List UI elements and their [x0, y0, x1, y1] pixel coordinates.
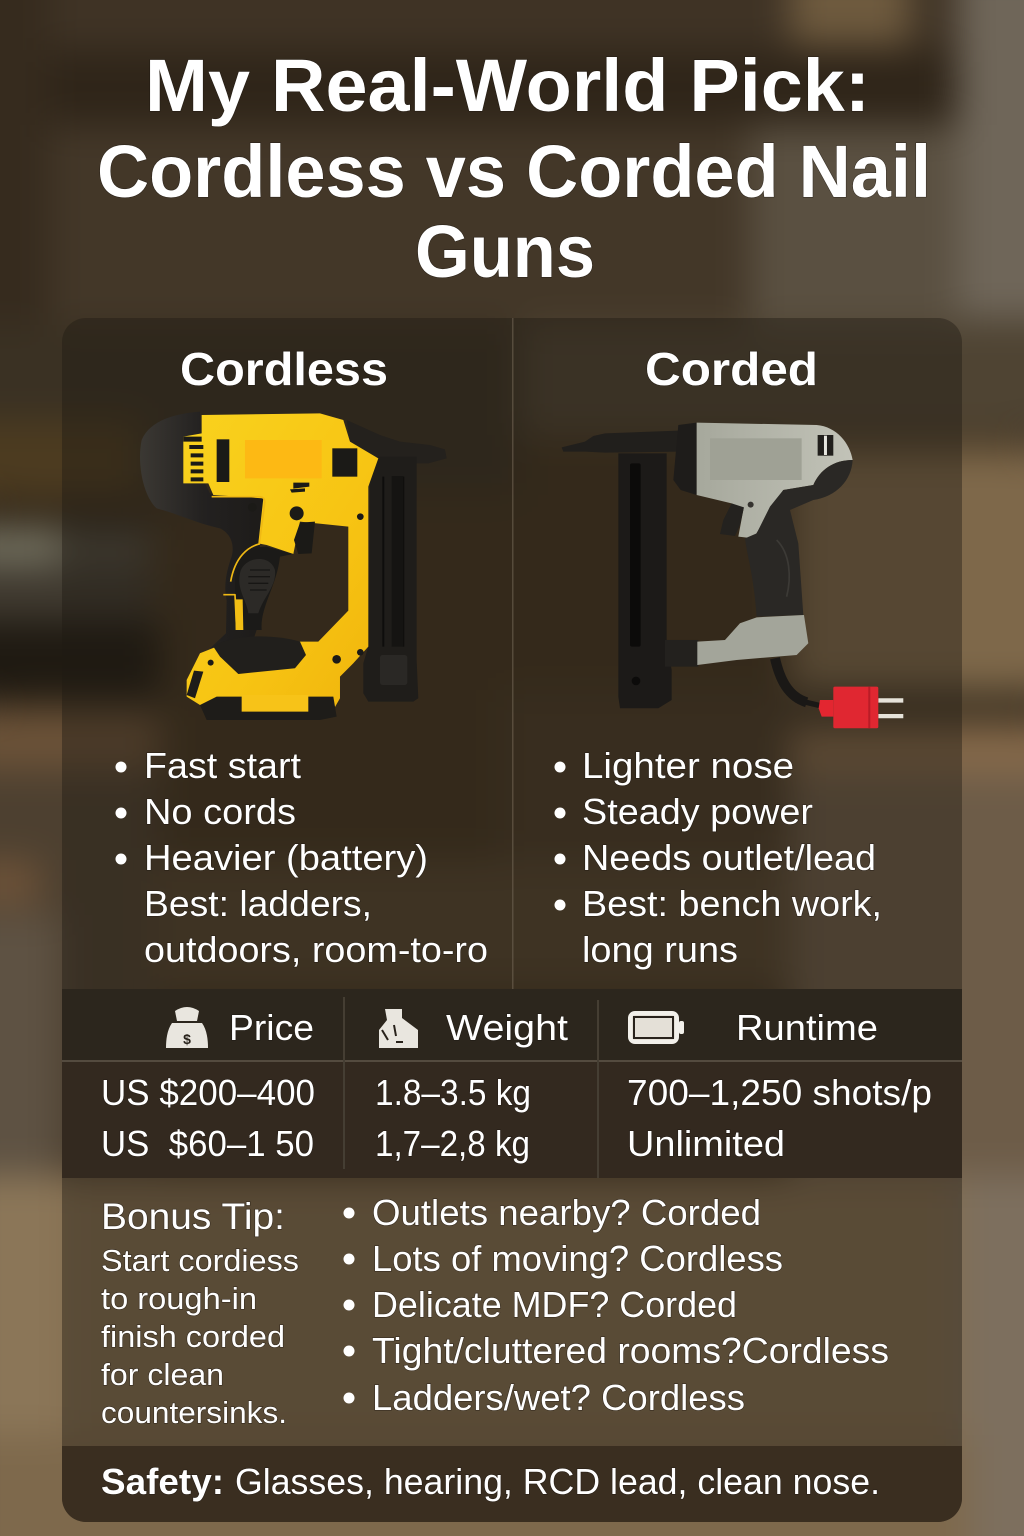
callout: bonus tip: Start cordiess: [101, 1243, 299, 1278]
list: decision checklist: Tight/cluttered rooms?Cordless: [372, 1330, 889, 1371]
list: corded points: Steady power: [582, 791, 813, 832]
footer: safety band: Safety:: [101, 1461, 224, 1502]
title: Cordless vs Corded Nail: [97, 130, 931, 213]
row: cordless values: US $200–400: [101, 1072, 315, 1113]
panel: cordless column: [116, 343, 488, 970]
list: cordless points: outdoors, room-to-ro: [144, 929, 488, 970]
icon: weight bottle: [379, 1009, 418, 1048]
list: decision checklist: [344, 1192, 889, 1418]
icon: battery: [630, 1013, 684, 1042]
list: cordless points: [116, 745, 488, 970]
icon: corded grey nail gun: [562, 423, 903, 728]
row: corded values: US $60–1 50: [101, 1123, 314, 1164]
table: price, weight and runtime: [62, 989, 962, 1178]
row: cordless values: 1.8–3.5 kg: [375, 1072, 531, 1113]
row: cordless values: [101, 1072, 932, 1113]
icon: money bag: [166, 1007, 208, 1048]
label: runtime: Runtime: [736, 1007, 878, 1048]
icon: money bag: $: [183, 1031, 191, 1047]
label: weight: Weight: [446, 1007, 568, 1048]
panel: comparison card: [62, 318, 962, 1522]
list: decision checklist: Delicate MDF? Corded: [372, 1284, 737, 1325]
panel: corded column: [554, 343, 903, 970]
callout: bonus tip: Bonus Tip:: [101, 1196, 285, 1237]
list: cordless points: Best: ladders,: [144, 883, 372, 924]
callout: bonus tip: countersinks.: [101, 1395, 287, 1430]
title: My Real-World Pick:: [145, 44, 870, 127]
list: decision checklist: Outlets nearby? Corded: [372, 1192, 761, 1233]
list: decision checklist: Ladders/wet? Cordless: [372, 1377, 745, 1418]
list: corded points: Needs outlet/lead: [582, 837, 876, 878]
list: corded points: Lighter nose: [582, 745, 794, 786]
list: corded points: Best: bench work,: [582, 883, 882, 924]
list: cordless points: Heavier (battery): [144, 837, 428, 878]
row: corded values: 1,7–2,8 kg: [375, 1123, 530, 1164]
callout: bonus tip: [101, 1196, 299, 1430]
row: cordless values: 700–1,250 shots/p: [627, 1072, 932, 1113]
row: corded values: [101, 1123, 785, 1164]
label: price: Price: [229, 1007, 314, 1048]
callout: bonus tip: finish corded: [101, 1319, 285, 1354]
list: decision checklist: Lots of moving? Cordless: [372, 1238, 783, 1279]
icon: cordless yellow nail gun: [140, 412, 447, 720]
footer: safety band: [62, 1446, 962, 1522]
list: cordless points: Fast start: [144, 745, 301, 786]
heading: corded: Corded: [645, 343, 818, 395]
title: [97, 44, 931, 293]
list: corded points: long runs: [582, 929, 738, 970]
list: corded points: [554, 745, 882, 970]
footer: safety band: Glasses, hearing, RCD lead, clean nose.: [235, 1461, 880, 1502]
callout: bonus tip: to rough-in: [101, 1281, 257, 1316]
title: Guns: [415, 210, 595, 293]
list: cordless points: No cords: [144, 791, 296, 832]
heading: cordless: Cordless: [180, 343, 388, 395]
row: corded values: Unlimited: [627, 1123, 785, 1164]
callout: bonus tip: for clean: [101, 1357, 224, 1392]
